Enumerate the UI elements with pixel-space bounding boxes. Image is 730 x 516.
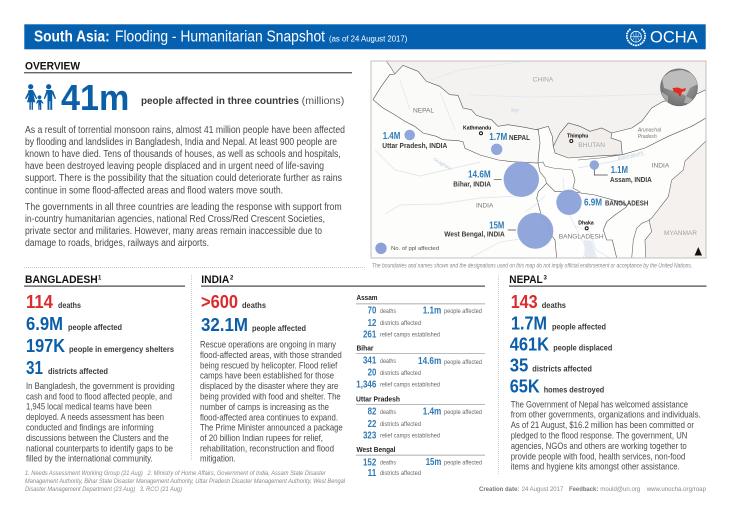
overview text block: in-country humanitarian agencies, national Red Cross/Red Crescent Societies, [25, 214, 325, 225]
India text: rehabilitation, reconstruction and flood [200, 442, 334, 453]
table: Bihar: 341 [363, 356, 377, 367]
table: Assam: relief camps established [380, 332, 440, 338]
India text: flood-affected areas, with those stranded [200, 349, 342, 360]
bubble label: Nepal: 1.7M [489, 132, 507, 143]
icon: family [25, 84, 56, 110]
Nepal text: The Government of Nepal has welcomed assistance [511, 398, 688, 409]
table: West Bengal: people affected [444, 460, 482, 466]
Nepal stats: 65K [510, 375, 540, 396]
India stats: >600 [201, 291, 238, 312]
table: Bihar: relief camps established [380, 382, 440, 388]
India text: number of camps is increasing as the [200, 401, 329, 412]
bubble label: Assam: 1.1M [611, 165, 628, 176]
globe highlight: South Asia [672, 88, 686, 97]
India text [200, 339, 343, 464]
map labels: countries and regions: Pradesh [638, 134, 657, 140]
Nepal text: items and hygiene kits amongst other assistance. [511, 461, 680, 472]
footnotes: 1. Needs Assessment Working Group (21 Aug) 2. Ministry of Home Affairs, Government of India, Assam State Disaster [25, 470, 326, 477]
inset globe [660, 69, 698, 106]
table: Bihar [356, 344, 485, 391]
label: people affected in three countries [141, 96, 299, 107]
table: Uttar Pradesh: people affected [444, 410, 482, 416]
Bangladesh stats: 31 [26, 357, 43, 378]
bubble label: Uttar Pradesh [382, 131, 448, 150]
India text: being provided with food and shelter. The [200, 390, 341, 401]
map markers: capitals: Kathmandu [463, 125, 492, 131]
table: Assam: 12 [368, 318, 377, 329]
banner title: (as of 24 August 2017) [329, 34, 408, 44]
Nepal heading: NEPAL [509, 274, 543, 286]
India text: of 20 billion Indian rupees for relief, [200, 432, 323, 443]
Nepal stats [510, 291, 612, 396]
bubble label: Uttar Pradesh: 1.4M [383, 131, 400, 142]
India text: The Prime Minister announced a package [200, 422, 343, 433]
table: Uttar Pradesh: Uttar Pradesh [356, 395, 400, 404]
overview text block: As a result of torrential monsoon rains, almost 41 million people have been affected [25, 125, 345, 136]
India stats: 32.1M [201, 314, 248, 335]
overview heading: OVERVIEW [25, 60, 80, 72]
table: Bihar: Bihar [356, 344, 374, 353]
Bangladesh text: deployed. A needs assessment has been [26, 411, 164, 422]
Bangladesh stats: 197K [26, 335, 66, 356]
Nepal text: As of 21 August, $16.2 million has been committed or [511, 419, 694, 430]
map markers: capitals [463, 125, 594, 230]
header banner [24, 24, 706, 49]
bubble label: Bihar: Bihar, INDIA [453, 180, 492, 189]
footer credits: Creation date: [479, 486, 519, 493]
headline stat: 41m people affected: (millions) [302, 96, 344, 107]
Bangladesh text: filled by the international community. [26, 453, 153, 464]
bubble label: West Bengal [444, 220, 505, 239]
India text: flood-affected area continues to expand. [200, 411, 338, 422]
Bangladesh stats [26, 291, 174, 378]
map labels: countries and regions [413, 77, 697, 241]
icon: UN emblem [627, 29, 645, 46]
Nepal text: pledged to the flood response. The government, UN [511, 430, 687, 441]
table: Assam: districts affected [380, 321, 421, 327]
table: Assam: 1.1m [423, 305, 441, 317]
bubble label: Nepal [489, 132, 530, 143]
Nepal heading [509, 274, 706, 287]
map proportional bubbles [404, 130, 599, 249]
map region: Nepal [373, 65, 540, 163]
table: Bihar: 14.6m [418, 355, 441, 367]
map labels: countries and regions: INDIA [476, 203, 494, 210]
overview text block: damage to roads, bridges, railways and airports. [25, 238, 209, 249]
Bangladesh text: In Bangladesh, the government is providing [26, 380, 175, 391]
icon: north arrow [695, 247, 702, 256]
Bangladesh heading: 1 [98, 276, 102, 282]
Nepal stats: 461K [510, 334, 550, 355]
Bangladesh text: 1,945 local medical teams have been [26, 401, 152, 412]
bubble label: Uttar Pradesh: Uttar Pradesh, INDIA [382, 141, 448, 150]
table: West Bengal: 152 [363, 457, 377, 468]
map labels: countries and regions: NEPAL [413, 107, 434, 114]
Nepal stats: people affected [552, 321, 606, 331]
map region: China [386, 61, 706, 146]
India heading: 2 [230, 276, 234, 282]
map rivers and internal lines [375, 62, 660, 258]
India text: Rescue operations are ongoing in many [200, 339, 336, 350]
map labels: countries and regions: BHUTAN [578, 142, 605, 149]
Bangladesh stats: 114 [26, 291, 54, 312]
table: West Bengal: 15m [426, 456, 441, 468]
Nepal stats: homes destroyed [544, 384, 604, 394]
table: Uttar Pradesh: 82 [368, 407, 377, 418]
banner title [34, 29, 408, 46]
bubble label: Nepal: NEPAL [509, 133, 530, 142]
India text: camps have been established for those [200, 370, 334, 381]
map labels: countries and regions: Ghaghara [432, 157, 453, 171]
Nepal text: agencies, NGOs and others are working together to [511, 440, 687, 451]
table: Bihar: people affected [444, 360, 482, 366]
map markers: capitals: Dhaka [578, 221, 594, 227]
Nepal stats: districts affected [532, 364, 592, 374]
Bangladesh stats: deaths [58, 300, 81, 310]
table: Assam: Assam [356, 293, 378, 302]
overview text block: have been destroyed leaving people displaced and in urgent need of life-saving [25, 161, 324, 172]
table: Assam [356, 293, 485, 341]
panel: Nepal [509, 274, 706, 472]
bubble label: West Bengal: West Bengal, INDIA [444, 230, 505, 239]
bubble label: Bihar [453, 170, 492, 189]
panel: Bangladesh [24, 274, 185, 464]
table: West Bengal [356, 445, 485, 479]
OCHA wordmark: OCHA [650, 28, 698, 47]
footnotes: Management Authority, Bihar State Disaster Management Authority, Uttar Pradesh Disaster Management Authority, West Bengal [25, 478, 346, 485]
overview text block: support. There is the possibility that the situation could deteriorate further as rains [25, 173, 342, 184]
India heading: INDIA [201, 274, 229, 286]
India stats: deaths [242, 300, 266, 310]
table: Uttar Pradesh: 323 [363, 431, 377, 442]
table: Uttar Pradesh [356, 395, 485, 442]
Nepal heading: 3 [544, 276, 548, 282]
table: Assam: people affected [444, 309, 482, 315]
map legend: No. of ppl affected [391, 246, 439, 252]
footer credits: Feedback: [569, 486, 598, 493]
footnotes: Disaster Management Department (23 Aug) 3. RCO (21 Aug) [25, 486, 182, 493]
overview text block: private sector and militaries. However, many areas remain inaccessible due to [25, 226, 322, 237]
map labels: countries and regions: MYANMAR [664, 230, 697, 237]
bubble label: Bangladesh: 6.9M [584, 197, 602, 208]
big number: 41m [61, 77, 129, 118]
India text: mitigation. [200, 453, 236, 464]
India text: being rescued by helicopter. Flood relief [200, 359, 338, 370]
map markers: capitals: Thimphu [567, 133, 589, 139]
map labels: countries and regions: Arunachal [637, 128, 662, 134]
Bangladesh text: national counterparts to identify gaps to be [26, 442, 173, 453]
map labels: countries and regions: INDIA [652, 162, 670, 169]
Nepal text [511, 398, 701, 472]
map labels: countries and regions: CHINA [533, 77, 554, 84]
table: West Bengal: 11 [368, 468, 377, 479]
table: Assam: 261 [363, 330, 377, 341]
Bangladesh text: conducted and findings are informing [26, 422, 154, 433]
table: Uttar Pradesh: deaths [380, 410, 396, 416]
map labels: countries and regions: BANGLADESH [559, 234, 604, 241]
table: Bihar: 20 [368, 368, 377, 379]
Nepal stats: 143 [511, 291, 538, 312]
table: Bihar: deaths [380, 359, 396, 365]
map region: Bangladesh [537, 183, 627, 258]
map legend [375, 243, 439, 254]
table: Uttar Pradesh: 22 [368, 419, 377, 430]
bubble label: Bihar: 14.6M [468, 170, 491, 181]
overview text block: continue in some flood-affected areas and flood waters move south. [25, 186, 283, 196]
headline stat: 41m people affected [25, 77, 344, 118]
table: Uttar Pradesh: relief camps established [380, 434, 440, 440]
footer credits: www.unocha.org/roap [646, 486, 706, 493]
panel: India [200, 274, 485, 479]
Bangladesh text: discussions between the Clusters and the [26, 432, 169, 443]
map labels: countries and regions: Jamuna [563, 189, 569, 207]
overview text block: known to have died. Tens of thousands of houses, as well as schools and hospitals, [25, 149, 341, 160]
Bangladesh heading: BANGLADESH [25, 274, 98, 286]
India text: displaced by the disaster where they are [200, 380, 338, 391]
Bangladesh stats: districts affected [48, 366, 108, 376]
table: Bihar: districts affected [380, 371, 421, 377]
map borders: northeast India [538, 155, 650, 258]
overview text block: by flooding and landslides in Bangladesh, India and Nepal. At least 900 people are [25, 137, 337, 148]
Bangladesh stats: people in emergency shelters [69, 344, 174, 354]
overview text block: The governments in all three countries are leading the response with support from [25, 202, 342, 213]
table: Bihar: 1,346 [356, 380, 377, 391]
table: Uttar Pradesh: 1.4m [423, 406, 441, 418]
footer credits: mould@un.org [600, 486, 641, 493]
table: Assam: 70 [368, 306, 377, 317]
bubble label: Assam: Assam, INDIA [610, 175, 652, 184]
bubble leader lines [494, 170, 608, 230]
map panel [371, 61, 706, 258]
banner title: South Asia: [34, 29, 110, 46]
Nepal stats: people displaced [553, 343, 612, 353]
India stats [201, 291, 306, 335]
Nepal text: provide people with food, health services, non-food [511, 450, 685, 461]
overview text block [25, 125, 345, 249]
bubble label: Assam [610, 165, 652, 184]
footnotes [25, 470, 346, 493]
table: West Bengal: West Bengal [356, 445, 396, 454]
table: West Bengal: districts affected [380, 471, 421, 477]
banner title: Flooding - Humanitarian Snapshot [115, 29, 326, 46]
Nepal stats: 35 [510, 355, 528, 376]
map region: Myanmar [645, 141, 706, 258]
table: West Bengal: deaths [380, 460, 396, 466]
Bangladesh text [26, 380, 175, 464]
map labels: countries and regions: Brahmaputra [617, 150, 644, 161]
bubble label: Bangladesh: BANGLADESH [605, 198, 648, 207]
bubble label: Bangladesh [584, 197, 648, 208]
table: Uttar Pradesh: districts affected [380, 422, 421, 428]
footer credits [479, 486, 706, 493]
Bangladesh text: cash and food to flood affected people, and [26, 390, 172, 401]
bubble label: West Bengal: 15M [489, 220, 504, 231]
India stats: people affected [252, 323, 306, 333]
Bangladesh heading [24, 274, 185, 287]
map labels: countries and regions: Sigri [511, 108, 520, 112]
map frame [371, 61, 706, 258]
India heading [201, 274, 485, 287]
footer credits: 24 August 2017 [522, 486, 564, 493]
map region: Bhutan [553, 123, 622, 158]
Bangladesh stats: people affected [68, 322, 122, 332]
Bangladesh stats: 6.9M [26, 313, 63, 334]
table: Assam: deaths [380, 309, 396, 315]
Nepal stats: deaths [542, 300, 566, 310]
Nepal stats: 1.7M [511, 312, 547, 333]
